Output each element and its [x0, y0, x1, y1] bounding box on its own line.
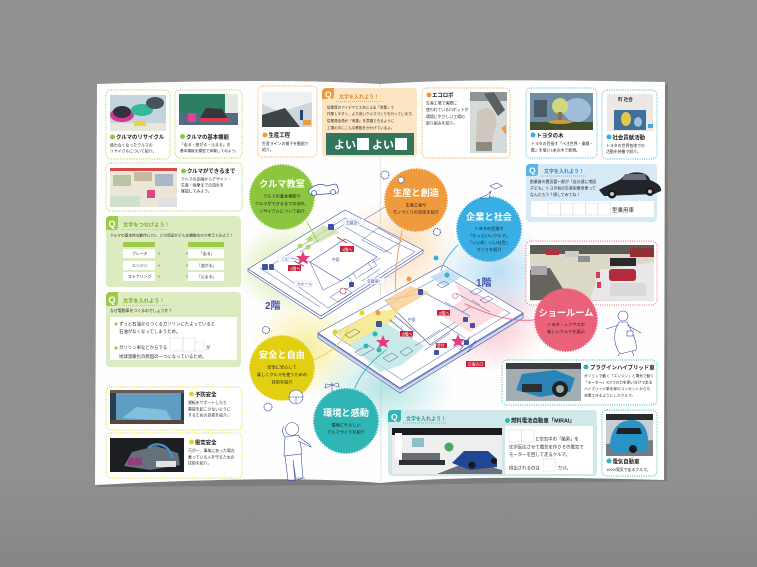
- label: map tags: 2階へ: [439, 310, 449, 316]
- circle: showroom: トヨタ・レクサスの: [547, 321, 585, 328]
- card: electric vehicle: 100%電気で走るクルマ。: [606, 467, 651, 472]
- photo: tree exhibit: [530, 93, 593, 130]
- zone: teal area: [350, 323, 425, 372]
- card: car basics: 「走る・曲がる・止まる」の: [180, 142, 231, 147]
- photo: recycling exhibit: [110, 95, 166, 131]
- quiz panel: why electric cars: が: [206, 344, 211, 351]
- card: plug-in hybrid: ガソリンで動く「エンジン」と電気で動く: [584, 373, 654, 378]
- quiz panel: why electric cars: 地球温暖化の原因の一つになっているため。: [119, 353, 207, 360]
- card: Toyota tree: トヨタの木: [536, 132, 564, 140]
- card: how a car is made: 確認してみよう。: [181, 188, 212, 194]
- circle: car classroom: クルマ教室: [259, 178, 305, 189]
- quiz panel: why electric cars: 文字を入れよう！: [123, 296, 165, 304]
- card: production process: [258, 86, 317, 157]
- card: collision safety: [106, 433, 242, 478]
- quiz panel: connect with lines: [106, 216, 241, 287]
- circle: safety and freedom: 技術を紹介: [272, 378, 293, 386]
- green sign board: よい: [334, 138, 356, 152]
- circle: company and society: トヨタの目指す: [474, 225, 504, 232]
- quiz panel: fill in factory word: 工場の中にこんな看板をかかげているよ。: [327, 125, 394, 130]
- circle: environment and emotion: 環境にやさしい: [331, 422, 361, 428]
- card: collision safety: 乗っている人を守るための: [188, 454, 235, 460]
- quiz panel: model name: [526, 164, 661, 222]
- quiz panel: why electric cars: なぜ電動車をつくるのでしょうか？: [110, 308, 172, 313]
- quiz panel: why electric cars: [106, 292, 241, 367]
- quiz panel: connect with lines: 「止まる」: [197, 274, 216, 279]
- icon: numbered map markers: [262, 224, 354, 294]
- quiz panel: connect with lines: 「曲がる」: [197, 263, 216, 268]
- photo: PHV chassis: [506, 363, 581, 401]
- photo: production line: [262, 92, 312, 127]
- quiz panel: fuel cell vehicle MIRAI: 燃料電池自動車「MIRAI」: [511, 416, 575, 424]
- icon: stairs arrow tags: [288, 237, 354, 271]
- card: car basics: [175, 90, 242, 158]
- circle: production and creation: [385, 169, 447, 231]
- circle: car classroom: クルマができるまでの流れ、: [255, 200, 309, 207]
- quiz panel: why electric cars: Q: [108, 295, 116, 305]
- connector lines from circles to zones: [307, 222, 534, 388]
- quiz panel: model name: なんだろう？探してみてね！: [530, 192, 580, 197]
- circle: car classroom: [250, 165, 314, 229]
- icon: numbered map markers: [332, 256, 475, 355]
- card: production process: 生産ラインの様子を動画で: [262, 141, 309, 146]
- illustration: girl pointing: [606, 311, 641, 356]
- quiz panel: model name: Q: [529, 166, 536, 176]
- quiz panel: fill in factory word: [322, 88, 417, 157]
- quiz panel: connect with lines: エンジン: [132, 263, 148, 268]
- quiz panel: fuel cell vehicle MIRAI: 化学反応させて電気を作りその電気で: [509, 444, 584, 450]
- card: car recycling: リサイクルについて紹介。: [110, 148, 156, 154]
- icon: steering wheel: [289, 390, 303, 404]
- circle: environment and emotion: 環境と感動: [323, 407, 369, 418]
- quiz panel: fuel cell vehicle MIRAI: モーターを回して走るクルマ。: [509, 451, 570, 458]
- quiz panel: fuel cell vehicle MIRAI: と空気中の「酸素」を: [535, 436, 579, 442]
- card: eco robot: 環境にやさしい工場の: [426, 114, 465, 119]
- card: social contribution: トヨタの世界各地での: [606, 143, 645, 148]
- card: preventive safety: するための技術を紹介。: [188, 412, 231, 418]
- colored glows behind the floor map: [232, 198, 561, 436]
- quiz panel: connect with lines: ブレーキ: [132, 251, 148, 256]
- card: showroom photo: [526, 241, 657, 305]
- card: plug-in hybrid: [502, 360, 657, 405]
- card: production process: 生産工程: [268, 131, 291, 139]
- circle: showroom: [535, 289, 597, 351]
- card: eco robot: 生産工場で実際に: [426, 100, 457, 106]
- circle: safety and freedom: 安全と自由: [259, 349, 305, 360]
- label: room tags: 会議室1: [346, 220, 360, 225]
- card: social contribution: 活動を映像で紹介。: [606, 149, 641, 154]
- photo: preventive safety display: [110, 390, 184, 424]
- circle: safety and freedom: 安全に安心して: [267, 364, 297, 370]
- circle: company and society: 「いい町、いい社会」: [468, 239, 510, 246]
- photo: showroom floor with cars: [530, 245, 654, 301]
- floor label: 1F: 1階: [476, 276, 492, 289]
- zone: blue area: [430, 268, 462, 287]
- quiz panel: why electric cars: ずっと石油からつくるガソリンにたよっていると: [119, 320, 215, 328]
- circle: showroom: 新しいクルマを展示: [547, 328, 585, 335]
- quiz panel: connect with lines: Q: [108, 219, 116, 229]
- card: Toyota tree: 数」を使い1本の木で表現。: [531, 148, 580, 152]
- card: car basics: クルマの基本機能: [186, 133, 230, 141]
- icon: stairs arrow tags: 1階へ: [290, 265, 300, 271]
- quiz panel: model name: 文字を入れよう！: [544, 168, 584, 175]
- label: room tags: [278, 219, 385, 287]
- card: car recycling: [106, 90, 170, 159]
- card: electric vehicle: 電気自動車: [612, 458, 640, 466]
- card: how a car is made: クルマができるまで: [187, 167, 236, 175]
- card: social contribution: [602, 90, 657, 159]
- illustration: boy looking into distance: [283, 422, 311, 481]
- icon: outline car: [309, 184, 338, 196]
- icon: flowers: [262, 326, 272, 411]
- photo: small EV: [606, 414, 653, 456]
- label: map tags: 受付: [437, 343, 445, 348]
- quiz panel: fuel cell vehicle MIRAI: 文字を入れよう！: [406, 416, 446, 422]
- card: car basics: 基本機能を模型で体験してみよう。: [180, 148, 239, 153]
- card: social contribution: 社会貢献活動: [612, 134, 645, 142]
- icon: vintage black car: [599, 172, 661, 198]
- card: preventive safety: 予防安全: [195, 390, 217, 398]
- card: how a car is made: [106, 163, 242, 211]
- quiz panel: fill in factory word: 従業員のアイデアと工夫による「改善」で: [327, 104, 394, 110]
- quiz panel: connect with lines: 文字をつなげよう！: [123, 220, 170, 228]
- circle: company and society: 「もっといいクルマ」: [468, 233, 510, 239]
- circle: showroom: ショールーム: [539, 308, 593, 318]
- zone: yellow-orange area: [335, 309, 400, 345]
- circle: company and society: 企業と社会: [466, 211, 513, 222]
- circle: production and creation: 生産工程や: [406, 202, 426, 208]
- quiz panel: connect with lines: ステアリング: [128, 274, 151, 279]
- quiz panel: fill in factory word: Q: [325, 90, 332, 100]
- quiz panel: model name: 型乗用車: [612, 206, 635, 214]
- card: plug-in hybrid: プラグインハイブリッド車: [590, 364, 655, 372]
- label: map tags: [400, 310, 485, 367]
- quiz panel: model name: 創業者の豊田喜一郎が「自分達に地図: [530, 179, 596, 184]
- icon: pink star markers: [376, 334, 465, 348]
- label: room tags: ロビー: [282, 256, 294, 262]
- icon: pink star marker: [296, 251, 310, 264]
- label: room tags: 会議室2: [367, 278, 381, 284]
- card: eco robot: 使われているロボットが: [426, 107, 469, 112]
- photo: production exhibit wall: [110, 168, 177, 207]
- quiz panel: connect with lines: クルマの基本的な動作に3つ、どの部品がどんな機能なのか考えてみよう！: [110, 232, 233, 238]
- circle: safety and freedom: 楽しくクルマを使うための: [257, 371, 307, 378]
- card: plug-in hybrid: ハイブリッド車を家のコンセントからも: [584, 386, 651, 391]
- icon: gears: [381, 171, 440, 236]
- quiz panel: why electric cars: 石油がなくなってしまうため。: [119, 328, 180, 335]
- icon: stairs arrow tags: 1階へ: [342, 246, 352, 252]
- quiz panel: fuel cell vehicle MIRAI: [388, 410, 597, 476]
- circle: safety and freedom: [250, 336, 314, 400]
- circle: company and society: [457, 197, 521, 261]
- photo: collision safety car frame: [110, 438, 184, 472]
- card: plug-in hybrid: 充電できるようにしたクルマ。: [584, 392, 635, 398]
- card: collision safety: 万が一、事故にあった場合: [188, 448, 235, 453]
- photo: basic functions exhibit: [179, 94, 238, 125]
- card: how a car is made: クルマの企画からデザイン・: [181, 176, 231, 182]
- card: collision safety: 衝突安全: [195, 438, 217, 446]
- quiz panel: fuel cell vehicle MIRAI: Q: [391, 412, 398, 422]
- card: Toyota tree: トヨタの目指す「べき世界・業績・: [531, 141, 593, 146]
- quiz panel: model name: 子ども」トヨタ初の生産型乗用車って: [530, 186, 596, 190]
- card: Toyota tree: [526, 88, 597, 158]
- card: eco robot: [422, 88, 510, 158]
- label: room tags: 大ホール: [297, 282, 312, 286]
- circle: environment and emotion: クルマづくりを紹介: [327, 428, 366, 436]
- label: map tags: 正面入口: [468, 362, 483, 366]
- green sign board: [326, 133, 414, 155]
- card: electric vehicle: [602, 410, 657, 476]
- floor map: 1F: [318, 256, 523, 393]
- label: room tags: 中庭: [332, 257, 340, 262]
- card: preventive safety: 運転をサポートしたり: [188, 400, 227, 405]
- card: eco robot: エコロボ: [432, 91, 454, 99]
- card: eco robot: 取り組みを紹介。: [426, 120, 457, 126]
- card: preventive safety: 事故を起こさないように: [188, 406, 231, 412]
- card: plug-in hybrid: 「モーター」の2つの力を使い分けで走る: [584, 380, 653, 384]
- card: how a car is made: 生産・耐摩までの流れを: [181, 182, 224, 188]
- card: car recycling: クルマのリサイクル: [116, 133, 165, 141]
- icon: sprout: [325, 382, 339, 392]
- quiz panel: connect with lines: 「走る」: [199, 251, 215, 256]
- label: map tags: 2階へ: [402, 330, 412, 336]
- circle: environment and emotion: [314, 389, 378, 453]
- quiz panel: fill in factory word: 文字を入れよう！: [339, 94, 379, 100]
- circle: company and society: づくりを紹介: [476, 246, 502, 253]
- green sign board: よい: [372, 138, 394, 152]
- circle: production and creation: 生産と創造: [393, 187, 439, 198]
- quiz panel: fuel cell vehicle MIRAI: だけ。: [558, 466, 571, 472]
- photo: MIRAI exhibit: [392, 428, 502, 474]
- icon: birds: [480, 183, 502, 198]
- brochure spread: [95, 80, 668, 487]
- quiz panel: fill in factory word: 従業員全員が「改善」を意識できるように: [327, 118, 395, 123]
- floor label: 2F: 2階: [265, 299, 281, 312]
- card: collision safety: 技術を紹介。: [188, 460, 211, 466]
- photo: social contribution display: 町 社会: [618, 96, 633, 103]
- quiz panel: fuel cell vehicle MIRAI: 排出されるのは: [509, 464, 540, 472]
- floor map: 2F: [248, 207, 423, 319]
- quiz panel: fill in factory word: 作業しやすく、より良いクルマづくりを行っています。: [327, 111, 415, 116]
- label: map tags: 中庭: [408, 317, 416, 322]
- quiz panel: why electric cars: ガソリン車などからでる: [119, 344, 167, 351]
- photo: robot arm: [470, 92, 507, 153]
- circle: car classroom: リサイクルについて紹介: [259, 208, 306, 214]
- circle: production and creation: モノづくりの技術を紹介: [393, 208, 440, 216]
- card: preventive safety: [106, 387, 242, 430]
- card: production process: 紹介。: [262, 147, 274, 152]
- card: car recycling: 使わなくなったクルマの: [110, 142, 153, 148]
- zone: pink area: [440, 282, 505, 332]
- circle: car classroom: クルマの基本機能や: [263, 192, 301, 200]
